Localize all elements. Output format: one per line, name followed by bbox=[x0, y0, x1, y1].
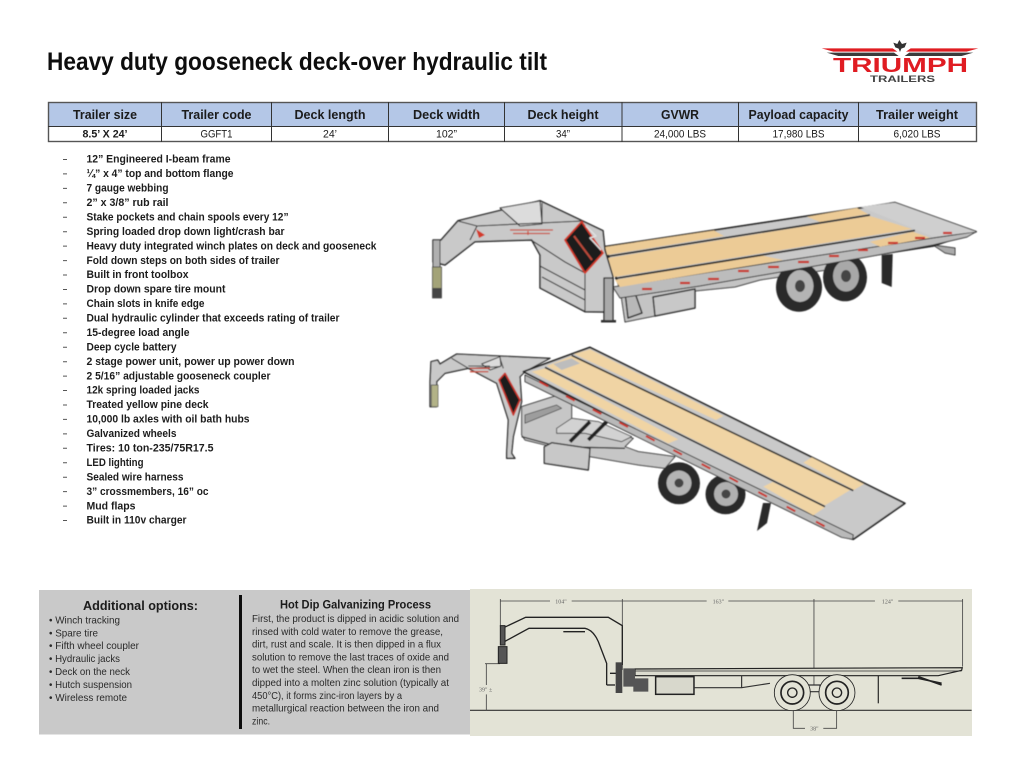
feature list: Tires: 10 ton-235/75R17.5 bbox=[86, 442, 214, 454]
feature list: Chain slots in knife edge bbox=[86, 298, 204, 310]
galvanizing text: dirt, rust and scale. It is then dipped in a flux bbox=[252, 639, 442, 651]
illustration: trailer level bbox=[432, 201, 976, 322]
fold down step bbox=[625, 290, 642, 318]
table value row: 24,000 LBS bbox=[654, 128, 706, 140]
red deck lights bbox=[539, 382, 825, 526]
illustration: trailer tilted bbox=[430, 347, 905, 539]
panel: additional options and galvanizing bbox=[39, 590, 470, 734]
table value row: 102” bbox=[436, 128, 457, 140]
panel: side view drawing: 163" bbox=[713, 600, 725, 606]
plank grooves bbox=[607, 215, 915, 278]
panel: side view drawing: 38" bbox=[810, 726, 819, 732]
feature list: LED lighting bbox=[86, 457, 144, 469]
plank grooves bbox=[545, 355, 853, 507]
toolbox bbox=[653, 289, 695, 316]
feature list: 2” x 3/8” rub rail bbox=[86, 197, 168, 209]
additional options list: • Hutch suspension bbox=[49, 679, 132, 691]
wheels bbox=[774, 675, 855, 711]
deck side bbox=[635, 668, 962, 676]
wheels bbox=[776, 253, 867, 312]
red deck lights bbox=[642, 233, 952, 289]
feature list: Heavy duty integrated winch plates on deck and gooseneck bbox=[86, 240, 377, 252]
tail plate bbox=[860, 203, 976, 237]
feature list: 15-degree load angle bbox=[86, 327, 190, 339]
galvanizing text: rinsed with cold water to remove the grease, bbox=[252, 626, 443, 638]
specification table: Deck width bbox=[413, 107, 480, 122]
landing jack bbox=[616, 662, 622, 693]
panel divider bbox=[239, 595, 242, 729]
additional options list: • Fifth wheel coupler bbox=[49, 640, 139, 652]
feature list: ¼” x 4” top and bottom flange bbox=[86, 168, 234, 180]
deck base bbox=[605, 203, 976, 294]
table header row bbox=[48, 102, 976, 126]
feature list: 3” crossmembers, 16” oc bbox=[86, 486, 208, 498]
neck top plate bbox=[500, 201, 542, 226]
galvanizing text: 450°C), it forms zinc-iron layers by a bbox=[252, 690, 402, 702]
wood planks bbox=[605, 208, 930, 287]
feature list: 2 stage power unit, power up power down bbox=[86, 356, 295, 368]
table value row bbox=[82, 128, 940, 140]
feature list: Stake pockets and chain spools every 12” bbox=[86, 212, 288, 224]
coupler jack bbox=[432, 240, 442, 298]
gooseneck frame bbox=[433, 201, 613, 312]
feature list: 2 5/16” adjustable gooseneck coupler bbox=[86, 370, 271, 382]
table value row: 6,020 LBS bbox=[894, 128, 940, 140]
panel: side view drawing: 39" ± bbox=[479, 688, 493, 694]
logo wings bbox=[822, 40, 978, 56]
table value row: GGFT1 bbox=[200, 128, 232, 140]
title: Heavy duty gooseneck deck-over hydraulic tilt bbox=[47, 48, 548, 76]
tail step bbox=[902, 677, 942, 685]
specification table bbox=[48, 102, 976, 142]
landing jack bbox=[601, 278, 616, 322]
toolbox bbox=[544, 443, 590, 470]
feature list: Fold down steps on both sides of trailer bbox=[86, 255, 280, 267]
feature list: Sealed wire harness bbox=[86, 471, 184, 483]
additional options list: • Hydraulic jacks bbox=[49, 653, 120, 665]
additional options list: • Winch tracking bbox=[49, 614, 120, 626]
specification table: Trailer code bbox=[182, 107, 252, 122]
galvanizing text: zinc. bbox=[252, 715, 270, 727]
galvanizing text: metallurgical reaction between the iron and bbox=[252, 703, 439, 715]
feature list: Mud flaps bbox=[86, 500, 136, 512]
neck details bbox=[458, 203, 585, 311]
specification table: Trailer weight bbox=[876, 107, 959, 122]
red neck mark bbox=[476, 229, 485, 238]
panel: side view drawing bbox=[470, 589, 972, 736]
mud flap bbox=[757, 503, 771, 531]
feature list: Built in front toolbox bbox=[86, 269, 189, 281]
feature list bbox=[63, 154, 377, 527]
lower frame bbox=[694, 676, 820, 692]
dimension labels: 104" bbox=[555, 600, 567, 606]
toolbox bbox=[656, 677, 694, 694]
dimension lines bbox=[485, 599, 963, 728]
specification table: Payload capacity bbox=[748, 107, 849, 122]
deck rail bbox=[613, 232, 976, 298]
feature list: Built in 110v charger bbox=[86, 515, 187, 527]
galvanizing heading: Hot Dip Galvanizing Process bbox=[280, 598, 431, 612]
coupler jack bbox=[498, 626, 507, 663]
galvanizing text: to wet the steel. When the clean iron is then bbox=[252, 664, 441, 676]
panel: side view drawing: 124" bbox=[882, 600, 894, 606]
gooseneck frame bbox=[430, 354, 550, 458]
lower frame bbox=[522, 395, 675, 468]
hitch assembly bbox=[623, 668, 648, 692]
side panel graphic bbox=[565, 222, 603, 273]
feature list: Treated yellow pine deck bbox=[86, 399, 209, 411]
galvanizing text: First, the product is dipped in acidic solution and bbox=[252, 613, 459, 625]
table value row: 17,980 LBS bbox=[772, 128, 824, 140]
logo subtitle: TRAILERS bbox=[870, 74, 935, 85]
galvanizing text: solution to remove the last traces of oxide and bbox=[252, 651, 449, 663]
deck base bbox=[523, 347, 905, 539]
tail step bbox=[933, 245, 955, 255]
feature list: Dual hydraulic cylinder that exceeds rating of trailer bbox=[86, 312, 340, 324]
wood planks bbox=[532, 349, 864, 515]
table value row: 8.5’ X 24’ bbox=[82, 128, 128, 140]
wheels bbox=[658, 462, 746, 514]
table value row: 34” bbox=[556, 128, 570, 140]
ground line bbox=[470, 709, 972, 712]
mud flap bbox=[877, 676, 880, 703]
table value row: 24’ bbox=[323, 128, 337, 140]
galvanizing text bbox=[252, 613, 459, 727]
specification table: Trailer size bbox=[73, 107, 137, 122]
additional options heading: Additional options: bbox=[83, 598, 198, 613]
deck plate bbox=[553, 358, 580, 370]
logo wordmark: TRIUMPH bbox=[833, 55, 968, 77]
galvanizing text: dipped into a molten zinc solution (typically at bbox=[252, 677, 449, 689]
additional options list: • Deck on the neck bbox=[49, 666, 131, 678]
main frame bbox=[620, 250, 867, 322]
specification table: GVWR bbox=[661, 107, 700, 122]
feature list: Galvanized wheels bbox=[86, 428, 176, 440]
feature list: 7 gauge webbing bbox=[86, 183, 168, 195]
specification table: Deck height bbox=[528, 107, 599, 122]
feature list: Deep cycle battery bbox=[86, 341, 177, 353]
specification table: Deck length bbox=[294, 107, 366, 122]
additional options list: • Spare tire bbox=[49, 627, 98, 639]
additional options list: • Wireless remote bbox=[49, 692, 127, 704]
feature list: 12k spring loaded jacks bbox=[86, 385, 200, 397]
feature list: 10,000 lb axles with oil bath hubs bbox=[86, 414, 250, 426]
additional options list bbox=[49, 614, 139, 704]
neck logo bbox=[510, 230, 553, 235]
feature list: Spring loaded drop down light/crash bar bbox=[86, 226, 285, 238]
mud flap bbox=[882, 254, 893, 287]
feature list: Drop down spare tire mount bbox=[86, 284, 226, 296]
logo: Triumph Trailers bbox=[822, 40, 978, 85]
gooseneck outline bbox=[502, 617, 622, 685]
feature list: 12” Engineered I-beam frame bbox=[86, 154, 230, 166]
